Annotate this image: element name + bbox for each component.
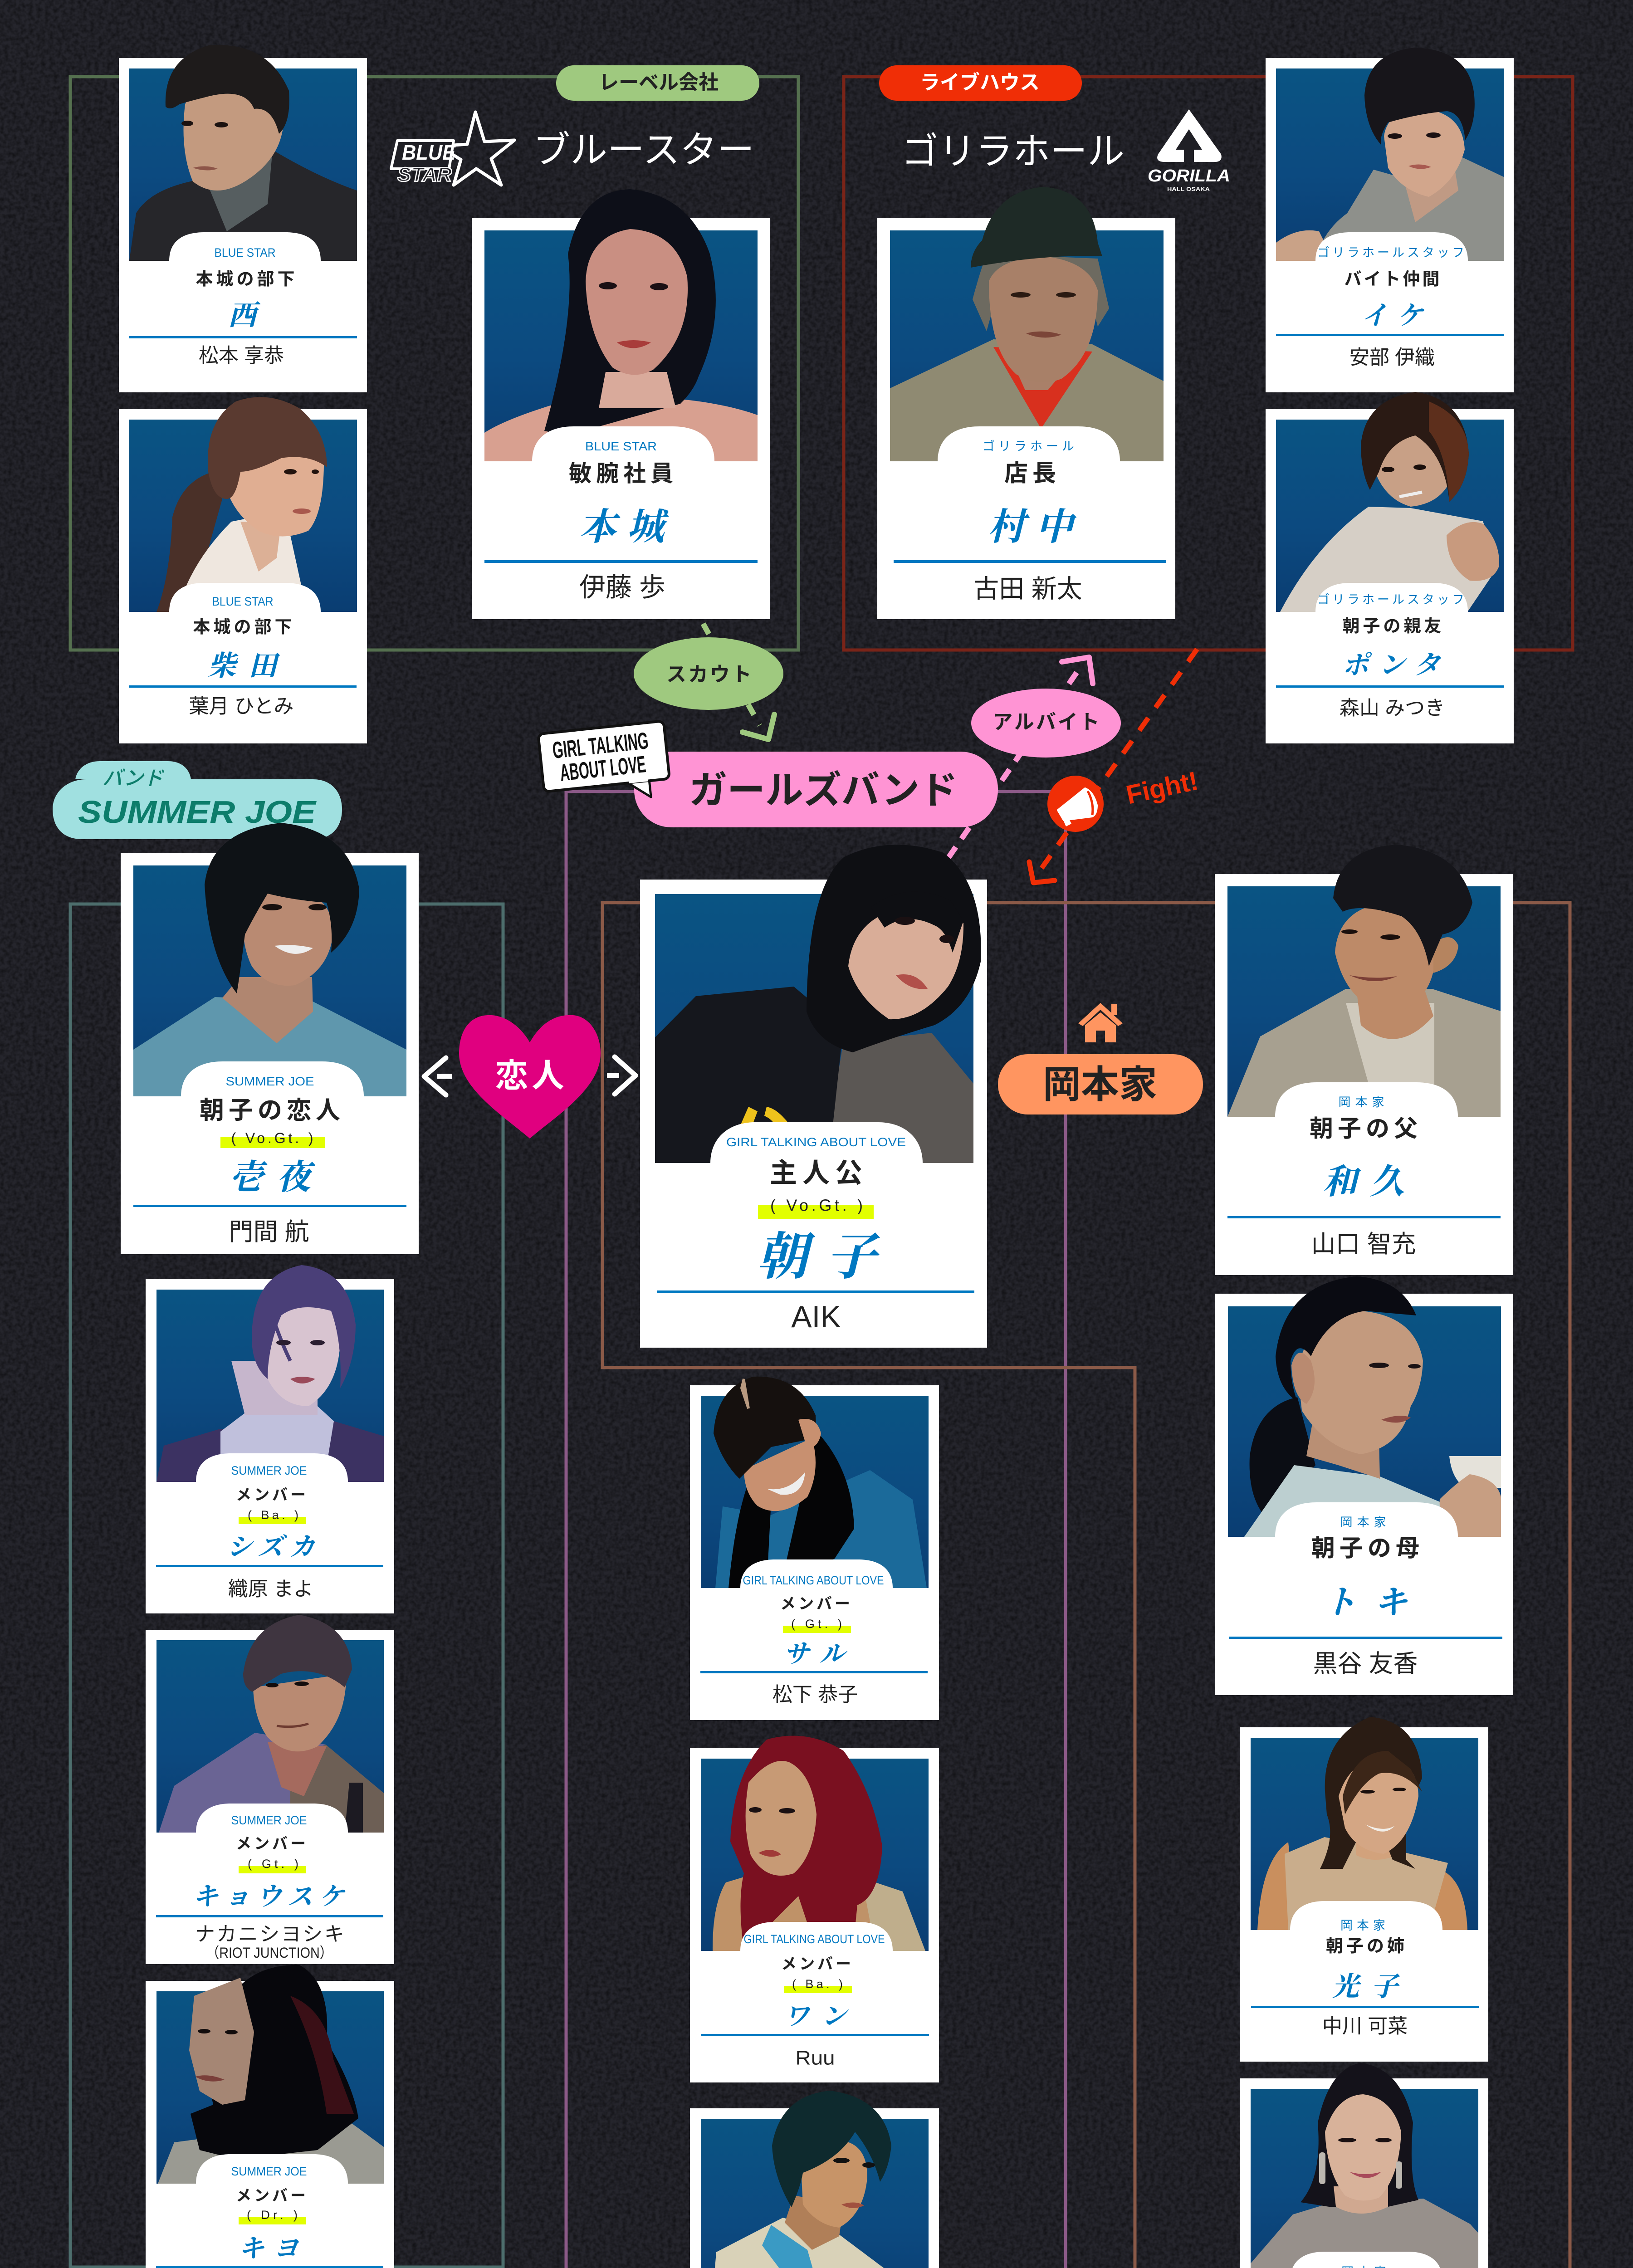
info tab: [169, 232, 321, 261]
pill: live house: ライブハウス: [920, 72, 1040, 93]
bubble: band Summer Joe: バンド: [103, 767, 165, 789]
card: トキ: 朝子の母: [1311, 1535, 1424, 1562]
card: 和久: 岡本家: [1338, 1095, 1389, 1109]
card: ワン: ワン: [784, 2003, 858, 2031]
card: イケ: バイト仲間: [1344, 270, 1442, 289]
icon: Blue Star logo: BLUE: [402, 141, 456, 164]
card: シズカ: 織原 まよ: [228, 1578, 313, 1600]
card: 壱夜: SUMMER JOE: [226, 1075, 314, 1088]
card: 本城: 敏腕社員: [569, 461, 678, 486]
speech bubble: GIRL TALKING ABOUT LOVE: [538, 721, 671, 808]
card: 柴田: 柴田: [208, 651, 289, 682]
pill: girls band: [634, 752, 998, 827]
card: キョウスケ: メンバー: [236, 1835, 308, 1853]
card: トキ: トキ: [1324, 1584, 1425, 1621]
card: 村中: [877, 187, 1175, 619]
icon: Gorilla logo: [1148, 109, 1230, 192]
arrow: part-time job (pink dashed): [948, 657, 1093, 858]
portrait: 光子: [1257, 1717, 1467, 1930]
card: キヨ: SUMMER JOE: [231, 2165, 307, 2178]
arrow: lovers: [424, 1057, 636, 1095]
card: ワン: Ruu: [796, 2047, 835, 2069]
card: 壱夜: ( Vo.Gt. ): [231, 1130, 313, 1146]
text: Fight!: Fight!: [1124, 766, 1201, 810]
portrait: サル: [714, 1377, 927, 1588]
card: 村中: 古田 新太: [973, 574, 1082, 603]
card: トキ: 黒谷 友香: [1313, 1650, 1418, 1677]
card: キヨ: ( Dr. ): [247, 2208, 298, 2222]
card: 柴田: 本城の部下: [193, 618, 295, 637]
highlight: part: [220, 1137, 325, 1148]
card: イケ: ゴリラホールスタッフ: [1317, 246, 1467, 259]
info tab: [740, 1922, 893, 1951]
card: 村中: ゴリラホール: [983, 440, 1078, 453]
card: 本城: 本城: [579, 506, 675, 548]
card: 朝子: AIK: [791, 1300, 841, 1334]
heading: Gorilla Hall: ゴリラホール: [901, 131, 1125, 172]
bubble: band Summer Joe: SUMMER JOE: [78, 794, 317, 830]
ellipse: part-time job: [971, 689, 1121, 758]
card: 村中: 村中: [988, 506, 1084, 548]
card: 柴田: BLUE STAR: [212, 595, 273, 608]
portrait: キーちゃん: [711, 2091, 919, 2268]
card: イケ: 安部 伊織: [1349, 347, 1435, 368]
card: シズカ: [146, 1265, 394, 1613]
card: 朝子: [640, 845, 987, 1348]
highlight: part: [239, 2217, 306, 2224]
portrait: ワン: [713, 1736, 925, 1951]
bubble: band Summer Joe: [53, 761, 342, 839]
portrait: イケ: [1276, 48, 1504, 261]
portrait: 陽奈: [1251, 2063, 1478, 2268]
portrait: シズカ: [156, 1265, 384, 1482]
card: キョウスケ: SUMMER JOE: [231, 1813, 307, 1827]
frame: Gorilla Hall group: [844, 77, 1573, 650]
card: 光子: 中川 可菜: [1322, 2015, 1408, 2038]
card: 和久: 朝子の父: [1310, 1116, 1422, 1142]
card: 西: 本城の部下: [196, 270, 298, 289]
portrait: 柴田: [156, 397, 327, 612]
info tab: [181, 1061, 364, 1096]
card: 和久: 山口 智充: [1311, 1231, 1416, 1258]
card: 壱夜: 門間 航: [229, 1218, 309, 1246]
card: ワン: メンバー: [781, 1955, 854, 1973]
card: 西: 松本 享恭: [199, 345, 284, 367]
info tab: [169, 583, 321, 612]
card: 光子: 光子: [1332, 1972, 1410, 2002]
card: 西: 西: [228, 300, 261, 331]
card: キヨ: [146, 1965, 394, 2268]
info tab: [938, 426, 1120, 461]
card: 朝子: ( Vo.Gt. ): [770, 1196, 863, 1215]
portrait: ポンタ: [1280, 392, 1499, 612]
portrait: キヨ: [158, 1965, 384, 2184]
card: 西: BLUE STAR: [214, 246, 276, 259]
icon: Blue Star logo: [391, 112, 514, 186]
ellipse: scout: [634, 637, 783, 710]
highlight: part: [784, 1986, 852, 1993]
portrait: トキ: [1244, 1276, 1501, 1537]
ellipse: part-time job: アルバイト: [993, 711, 1101, 733]
card: 柴田: [119, 397, 367, 743]
card: シズカ: シズカ: [227, 1533, 321, 1561]
info tab: [1315, 583, 1468, 612]
frame: Blue Star group: [70, 77, 798, 650]
card: イケ: イケ: [1361, 301, 1433, 330]
card: 本城: BLUE STAR: [585, 440, 657, 453]
heart: lovers: 恋人: [495, 1058, 568, 1094]
info tab: [740, 1559, 893, 1588]
info tab: [710, 1122, 923, 1163]
portrait: 壱夜: [133, 823, 406, 1096]
card: キョウスケ: [146, 1615, 394, 1964]
card: 壱夜: 朝子の恋人: [200, 1097, 345, 1124]
info tab: [1275, 1502, 1458, 1537]
card: 壱夜: 壱夜: [229, 1158, 323, 1197]
info tab: [196, 1453, 348, 1482]
card: トキ: [1215, 1276, 1513, 1695]
pill: live house: [879, 65, 1082, 101]
frame: Summer Joe group: [70, 904, 503, 2267]
card: 陽奈: [1240, 2063, 1488, 2268]
card: ワン: GIRL TALKING ABOUT LOVE: [744, 1932, 885, 1946]
heart: lovers: [459, 1015, 601, 1139]
portrait: 西: [129, 45, 357, 261]
card: 光子: 朝子の姉: [1326, 1937, 1408, 1956]
info tab: [1290, 2252, 1442, 2268]
icon: house: [1078, 1003, 1123, 1042]
card: 和久: 和久: [1323, 1163, 1417, 1201]
card: 本城: 伊藤 歩: [579, 572, 665, 602]
pill: Okamoto family: 岡本家: [1043, 1063, 1157, 1106]
card: ワン: [690, 1736, 939, 2082]
card: サル: ( Gt. ): [791, 1617, 842, 1631]
arrow: fight (red dashed): [1029, 649, 1197, 883]
card: キョウスケ: ( Gt. ): [248, 1857, 298, 1871]
card: キヨ: キヨ: [239, 2235, 308, 2263]
icon: Gorilla logo: GORILLA: [1148, 166, 1230, 186]
speech bubble: GIRL TALKING ABOUT LOVE: GIRL TALKING: [551, 728, 650, 764]
card: 朝子: 主人公: [770, 1158, 868, 1188]
card: キョウスケ: キョウスケ: [193, 1883, 351, 1911]
arrow: scout (green dashed): [703, 624, 774, 739]
icon: Blue Star logo: STAR: [397, 163, 452, 186]
card: キーちゃん: [690, 2091, 939, 2268]
card: ポンタ: 森山 みつき: [1340, 697, 1445, 719]
card: ポンタ: ゴリラホールスタッフ: [1317, 593, 1467, 606]
portrait: 朝子: [655, 845, 981, 1163]
card: キョウスケ: （RIOT JUNCTION）: [206, 1945, 333, 1961]
card: ポンタ: 朝子の親友: [1342, 617, 1445, 636]
card: ポンタ: ポンタ: [1342, 650, 1450, 679]
info tab: [1275, 1082, 1458, 1117]
card: 光子: 岡本家: [1340, 1919, 1389, 1932]
info tab: [1290, 1901, 1442, 1930]
portrait: 本城: [484, 189, 758, 461]
pill: girls band: ガールズバンド: [689, 769, 958, 811]
card: シズカ: メンバー: [236, 1486, 308, 1504]
info tab: [1315, 232, 1468, 261]
card: トキ: 岡本家: [1340, 1515, 1391, 1529]
frame: Okamoto family group: [602, 903, 1570, 2268]
card: ワン: ( Ba. ): [792, 1977, 843, 1991]
card: キョウスケ: ナカニシヨシキ: [195, 1923, 346, 1945]
card: 村中: 店長: [1004, 460, 1061, 487]
card: サル: 松下 恭子: [772, 1684, 858, 1706]
card: シズカ: SUMMER JOE: [231, 1464, 307, 1477]
card: 壱夜: [121, 823, 419, 1254]
card: 西: [119, 45, 367, 392]
portrait: キョウスケ: [159, 1615, 384, 1833]
highlight: part: [758, 1205, 874, 1219]
pill: label company: レーベル会社: [599, 72, 719, 93]
highlight: part: [239, 1517, 306, 1524]
card: 朝子: 朝子: [757, 1229, 895, 1286]
icon: Gorilla logo: HALL OSAKA: [1167, 186, 1210, 192]
icon: megaphone: [1047, 776, 1104, 832]
card: イケ: [1266, 48, 1514, 392]
frame: girls band group: [566, 792, 1066, 2268]
info tab: [196, 2154, 348, 2184]
highlight: part: [239, 1866, 306, 1873]
pill: Okamoto family: [998, 1054, 1203, 1114]
card: 柴田: 葉月 ひとみ: [189, 695, 293, 718]
info tab: [532, 426, 714, 461]
card: シズカ: ( Ba. ): [248, 1508, 298, 1522]
card: 朝子: GIRL TALKING ABOUT LOVE: [726, 1135, 906, 1149]
ellipse: scout: スカウト: [666, 663, 753, 686]
highlight: part: [783, 1626, 851, 1633]
card: ポンタ: [1266, 392, 1514, 743]
card: 光子: [1240, 1717, 1488, 2062]
card: 和久: [1215, 845, 1513, 1275]
card: 本城: [472, 189, 770, 619]
portrait: 和久: [1227, 845, 1501, 1117]
heading: Blue Star: ブルースター: [533, 130, 754, 171]
info tab: [196, 1804, 348, 1833]
card: サル: メンバー: [780, 1595, 853, 1613]
card: キヨ: メンバー: [236, 2187, 308, 2204]
pill: label company: [556, 65, 759, 101]
speech bubble: GIRL TALKING ABOUT LOVE: ABOUT LOVE: [559, 751, 647, 787]
portrait: 村中: [890, 187, 1164, 461]
card: サル: [690, 1377, 939, 1720]
card: サル: GIRL TALKING ABOUT LOVE: [743, 1574, 884, 1587]
card: サル: サル: [783, 1640, 857, 1668]
